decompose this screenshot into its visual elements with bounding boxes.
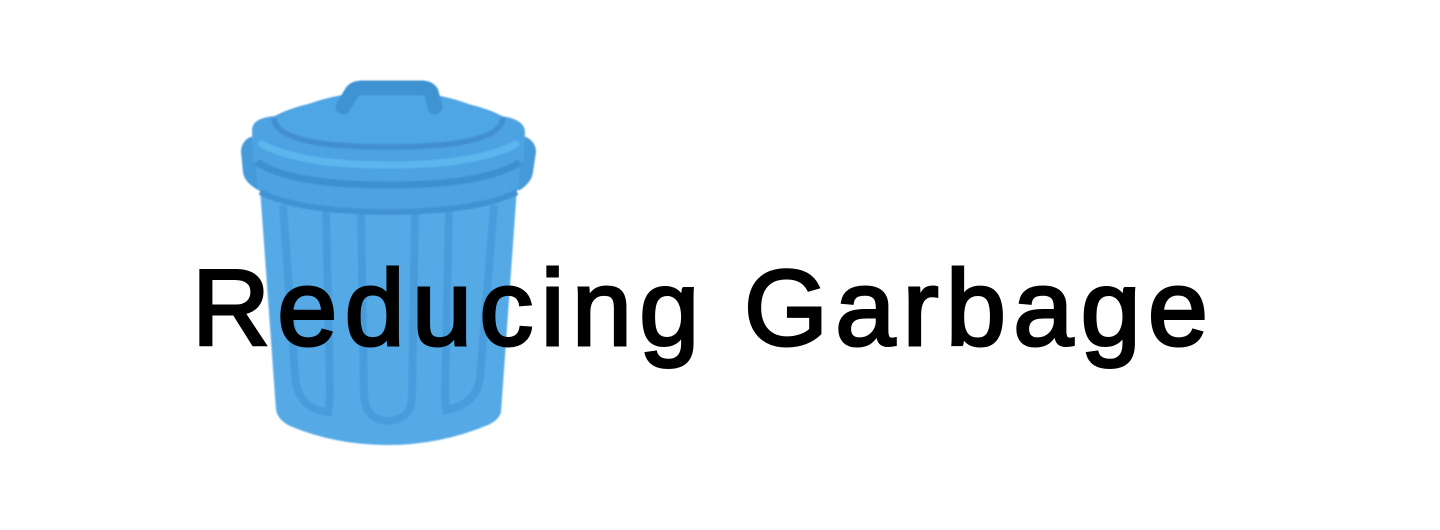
lid handle [343,88,435,107]
lid dark groove [257,162,520,185]
title: Reducing Garbage [192,247,1208,368]
lid highlight stripe [262,144,516,165]
rim lower band [256,166,520,213]
trash can body [260,188,517,445]
rim side tabs [241,137,536,190]
lid [252,96,525,187]
icon: blue trash can [241,88,536,445]
body ribs [283,205,494,421]
lid top groove [274,118,503,147]
